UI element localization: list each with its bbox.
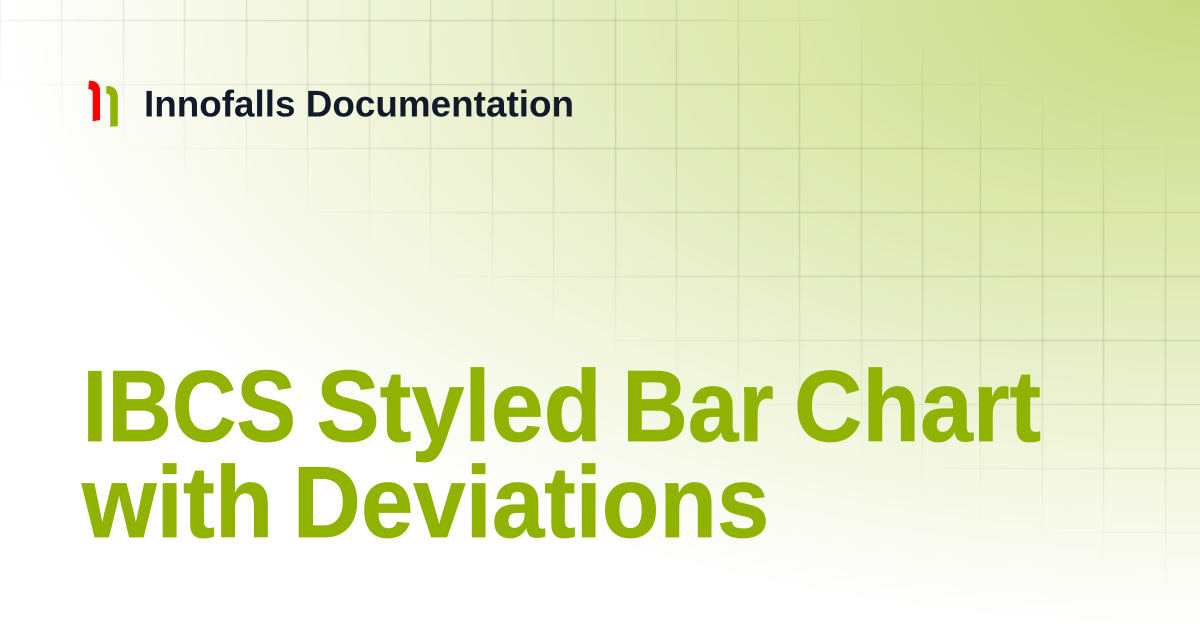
title: Chart bbox=[794, 351, 1041, 463]
title: Styled bbox=[316, 351, 602, 463]
title: with bbox=[81, 447, 273, 559]
brand name: Innofalls Documentation bbox=[144, 84, 574, 125]
title: IBCS bbox=[82, 351, 296, 463]
icon: red stroke bbox=[88, 81, 100, 121]
icon: green stroke bbox=[106, 86, 118, 127]
brand logo bbox=[88, 80, 118, 127]
title: Deviations bbox=[293, 447, 769, 559]
title: Bar bbox=[622, 351, 774, 463]
